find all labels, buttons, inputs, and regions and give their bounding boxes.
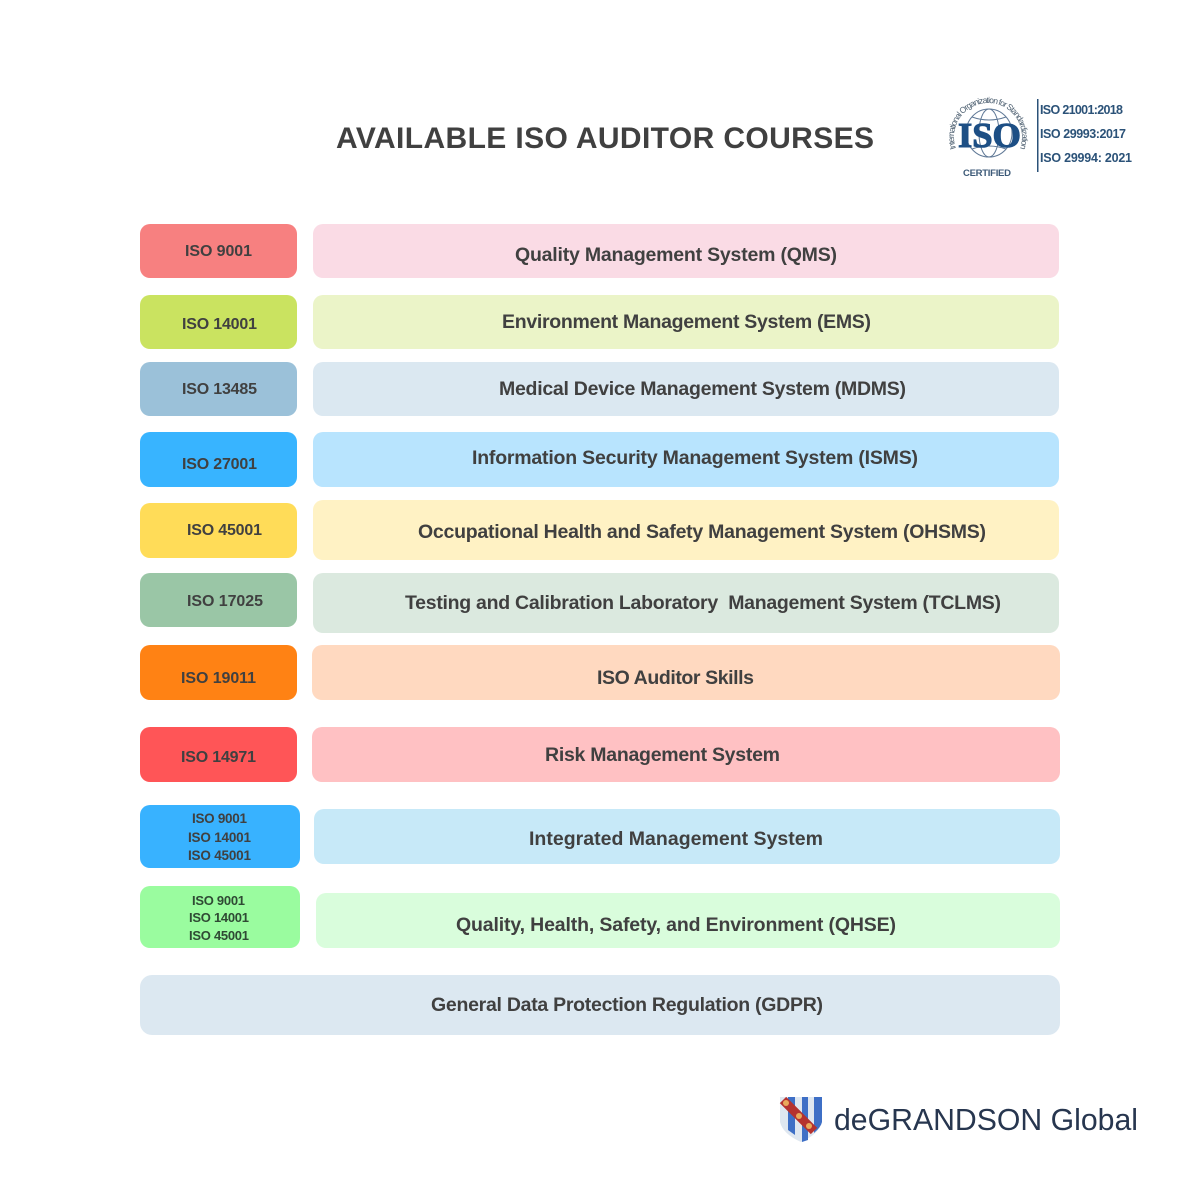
row: ISO 14001 code: ISO 14001: [182, 316, 257, 333]
row: ISO 14971 code: ISO 14971: [181, 749, 256, 766]
badge certified: CERTIFIED: [963, 168, 1011, 179]
row: integrated standards codes: ISO 9001: [192, 811, 247, 826]
row: ISO 9001 code: [140, 224, 297, 278]
badge ring text: [954, 103, 1022, 148]
row: Quality, Health, Safety, and Environment: [316, 893, 1060, 948]
row: General Data Protection Regulation: [140, 975, 1060, 1035]
row: Integrated Management System: [314, 809, 1060, 864]
row: ISO 17025 code: ISO 17025: [187, 593, 263, 610]
row: integrated standards codes: ISO 45001: [188, 848, 251, 863]
icon: ISO certified badge: [949, 96, 1132, 179]
row: ISO 9001 code: ISO 9001: [185, 243, 252, 260]
row: Quality Management System: Quality Management System (QMS): [515, 244, 837, 266]
row: Testing and Calibration Laboratory Management System: [313, 573, 1059, 633]
icon: shield: [780, 1097, 822, 1142]
row: Risk Management System: Risk Management System: [545, 744, 780, 766]
row: ISO 27001 code: [140, 432, 297, 487]
row: Information Security Management System: [313, 432, 1059, 487]
row: Quality, Health, Safety, and Environment: Quality, Health, Safety, and Environment (QHSE): [456, 914, 896, 936]
row: Testing and Calibration Laboratory Management System: Testing and Calibration Laboratory Management System (TCLMS): [405, 592, 1001, 614]
row: Integrated Management System: Integrated Management System: [529, 828, 823, 850]
row: ISO 13485 code: ISO 13485: [182, 381, 257, 398]
row: Risk Management System: [312, 727, 1060, 782]
logo wordmark: deGRANDSON Global: [834, 1102, 1138, 1137]
row: ISO 13485 code: [140, 362, 297, 416]
row: ISO 27001 code: ISO 27001: [182, 456, 257, 473]
row: Medical Device Management System: Medical Device Management System (MDMS): [499, 378, 906, 400]
row: QHSE standards codes: ISO 9001: [192, 893, 245, 908]
row: QHSE standards codes: ISO 14001: [189, 910, 249, 925]
row: ISO 19011 code: ISO 19011: [181, 670, 256, 687]
badge wordmark: ISO: [958, 116, 1021, 155]
row: Information Security Management System: Information Security Management System (ISMS): [472, 447, 918, 469]
row: ISO 19011 code: [140, 645, 297, 700]
row: integrated standards codes: ISO 14001: [188, 830, 251, 845]
row: ISO 45001 code: ISO 45001: [187, 522, 262, 539]
row: General Data Protection Regulation: General Data Protection Regulation (GDPR): [431, 994, 823, 1016]
logo: deGRANDSON Global: [780, 1097, 1138, 1142]
row: Medical Device Management System: [313, 362, 1059, 416]
badge globe: [966, 109, 1012, 157]
badge standard 2: ISO 29993:2017: [1040, 127, 1126, 141]
row: ISO 17025 code: [140, 573, 297, 627]
row: Quality Management System: [313, 224, 1059, 278]
row: Occupational Health and Safety Management System: Occupational Health and Safety Management System (OHSMS): [418, 521, 986, 543]
badge divider: [1037, 99, 1038, 172]
badge standard 3: ISO 29994: 2021: [1040, 151, 1132, 165]
badge standard 1: ISO 21001:2018: [1040, 103, 1123, 117]
row: ISO 45001 code: [140, 503, 297, 558]
row: ISO Auditor Skills: ISO Auditor Skills: [597, 667, 754, 689]
row: ISO 14971 code: [140, 727, 297, 782]
row: integrated standards codes: [140, 805, 300, 868]
row: ISO 14001 code: [140, 295, 297, 349]
row: Environment Management System: Environment Management System (EMS): [502, 311, 871, 333]
icon: ISO certified badge: International Organization for Standardization: [949, 96, 1028, 150]
row: QHSE standards codes: [140, 886, 300, 948]
row: ISO Auditor Skills: [312, 645, 1060, 700]
row: Environment Management System: [313, 295, 1059, 349]
row: QHSE standards codes: ISO 45001: [189, 928, 249, 943]
title: AVAILABLE ISO AUDITOR COURSES: [336, 122, 874, 155]
row: Occupational Health and Safety Management System: [313, 500, 1059, 560]
